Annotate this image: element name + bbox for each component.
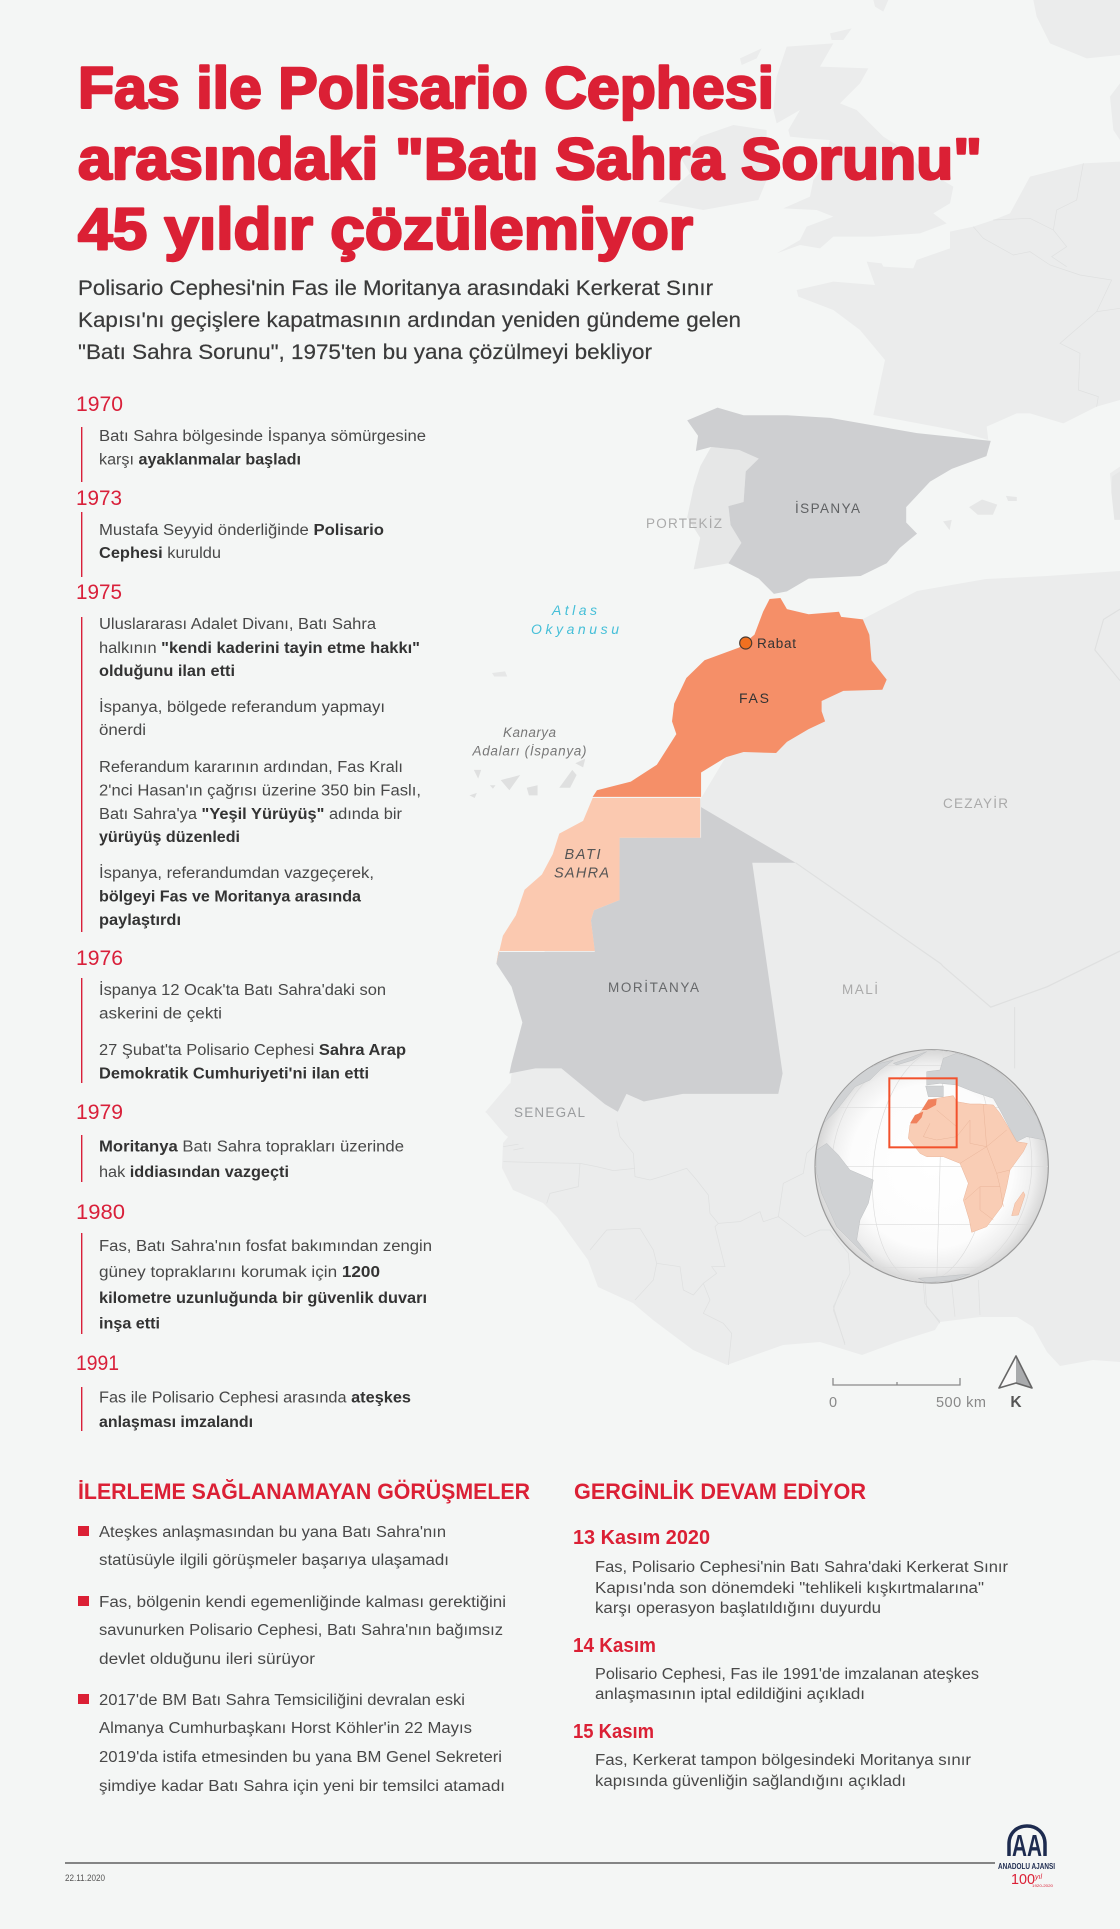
map label: Cezayir: CEZAYİR [943, 796, 1008, 811]
event: 14 Kasım: anlaşmasının iptal edildiğini açıkladı [595, 1686, 865, 1703]
timeline: 1975: 2'nci Hasan'ın çağrısı üzerine 350 bin Faslı, [99, 782, 421, 800]
event: 15 Kasım: kapısında güvenliğin sağlandığını açıkladı [595, 1773, 906, 1790]
bullet 3: 2017'de BM Batı Sahra Temsiciliğini devralan eski [99, 1692, 465, 1709]
title: 45 yıldır çözülemiyor [78, 197, 693, 262]
subtitle [78, 277, 741, 364]
timeline: 1975: yürüyüş düzenledi [99, 829, 240, 846]
timeline: 1975: olduğunu ilan etti [99, 663, 235, 680]
background map: Europe [658, 0, 1120, 500]
timeline: 1991: Fas ile Polisario Cephesi arasında ateşkes [99, 1390, 411, 1406]
timeline: 1975: 1975 [76, 580, 122, 604]
event: 15 Kasım: 15 Kasım [573, 1721, 654, 1743]
event: 13 Kasım 2020: 13 Kasım 2020 [573, 1527, 710, 1549]
timeline: 1973: Mustafa Seyyid önderliğinde Polisario [99, 522, 384, 539]
title [78, 56, 982, 262]
event: 15 Kasım: Fas, Kerkerat tampon bölgesindeki Moritanya sınır [595, 1752, 971, 1769]
logo: Anadolu Ajansı: 100 [1011, 1871, 1035, 1888]
timeline: 1975: İspanya, referandumdan vazgeçerek, [99, 864, 374, 882]
timeline: 1975: halkının "kendi kaderini tayin etme hakkı" [99, 640, 420, 657]
north arrow [999, 1356, 1032, 1411]
scale bar [829, 1378, 986, 1411]
bullet 2: devlet olduğunu ileri sürüyor [99, 1651, 315, 1668]
logo: Anadolu Ajansı: AA [1012, 1828, 1042, 1863]
map label: Atlas Okyanusu [531, 602, 619, 637]
map label: Portekiz: PORTEKİZ [646, 516, 722, 531]
timeline: 1979 [76, 1100, 404, 1182]
timeline: 1979: hak iddiasından vazgeçti [99, 1164, 289, 1181]
bullet 2 [78, 1594, 506, 1668]
timeline: 1975: Uluslararası Adalet Divanı, Batı Sahra [99, 616, 376, 633]
map: Algeria Mali border [796, 609, 1120, 1068]
logo: Anadolu Ajansı: 1920-2020 [1032, 1883, 1054, 1888]
timeline: 1970: Batı Sahra bölgesinde İspanya sömürgesine [99, 427, 426, 445]
heading: tension continues: GERGİNLİK DEVAM EDİYOR [574, 1479, 866, 1504]
globe: Africa [908, 1096, 1027, 1232]
bullet 1: statüsüyle ilgili görüşmeler başarıya ulaşamadı [99, 1552, 449, 1569]
logo: Anadolu Ajansı: yıl [1034, 1874, 1042, 1881]
timeline: 1991: 1991 [76, 1351, 119, 1375]
panel: tension continues [573, 1479, 1008, 1790]
globe: graticule [815, 1040, 1048, 1293]
background map: West Africa country borders [503, 1113, 940, 1365]
map label: Batı Sahra: BATI [564, 847, 600, 863]
map label: Batı Sahra: SAHRA [554, 866, 609, 882]
map label: Fas: FAS [739, 690, 769, 706]
timeline: 1975 [76, 580, 421, 932]
subtitle: Kapısı'nı geçişlere kapatmasının ardından yeniden gündeme gelen [78, 309, 741, 332]
map: Spain [687, 408, 991, 594]
bullet 2: savunurken Polisario Cephesi, Batı Sahra'nın bağımsız [99, 1622, 503, 1639]
map: Mauritania [496, 807, 796, 1112]
scale bar: 500 km [936, 1395, 986, 1411]
timeline: 1980: inşa etti [99, 1316, 160, 1332]
timeline: 1975: Referandum kararının ardından, Fas Kralı [99, 759, 403, 776]
timeline: 1976: İspanya 12 Ocak'ta Batı Sahra'daki son [99, 981, 386, 999]
event: 13 Kasım 2020: Fas, Polisario Cephesi'nin Batı Sahra'daki Kerkerat Sınır [595, 1559, 1008, 1576]
timeline: 1976: 1976 [76, 946, 123, 970]
locator globe [815, 1040, 1048, 1293]
map label: Mali: MALİ [842, 982, 878, 997]
event: 14 Kasım: 14 Kasım [573, 1635, 656, 1657]
bullet 2: Fas, bölgenin kendi egemenliğinde kalması gerektiğini [99, 1594, 506, 1611]
map label: Kanarya Adaları: Kanarya [503, 725, 556, 740]
footer rule [65, 1862, 995, 1864]
timeline: 1970: karşı ayaklanmalar başladı [99, 452, 301, 468]
timeline: 1976 [76, 946, 406, 1083]
map label: Senegal: SENEGAL [514, 1105, 585, 1120]
timeline: 1973 [76, 486, 384, 577]
event: 13 Kasım 2020 [573, 1527, 1008, 1617]
map: Senegal and neighbours [486, 1073, 618, 1150]
map label: Kanarya Adaları [472, 725, 586, 758]
background map: Africa land [485, 571, 1120, 1366]
timeline: 1976: askerini de çekti [99, 1006, 222, 1022]
timeline: 1980: güney topraklarını korumak için 1200 [99, 1264, 380, 1281]
timeline: 1970: 1970 [76, 392, 123, 416]
logo: Anadolu Ajansı: ANADOLU AJANSI [998, 1862, 1055, 1871]
map label: İspanya: İSPANYA [795, 501, 860, 516]
panel: stalled talks [78, 1479, 530, 1795]
timeline: 1979: Moritanya Batı Sahra toprakları üzerinde [99, 1138, 404, 1156]
subtitle: Polisario Cephesi'nin Fas ile Moritanya arasındaki Kerkerat Sınır [78, 277, 713, 300]
timeline: 1991: anlaşması imzalandı [99, 1414, 253, 1431]
event: 14 Kasım [573, 1635, 979, 1703]
timeline: 1991 [76, 1351, 411, 1431]
timeline: 1979: 1979 [76, 1100, 123, 1124]
timeline: 1976: Demokratik Cumhuriyeti'ni ilan etti [99, 1066, 369, 1082]
timeline: 1975: Batı Sahra'ya "Yeşil Yürüyüş" adında bir [99, 806, 402, 823]
map label: Batı Sahra [554, 847, 609, 882]
timeline: 1980: 1980 [76, 1200, 125, 1224]
bullet 1 [78, 1524, 449, 1569]
globe: grey continents [817, 1052, 1045, 1283]
map: Portugal [687, 447, 759, 569]
bullet 3: Almanya Cumhurbaşkanı Horst Köhler'in 22 Mayıs [99, 1720, 472, 1737]
footer date: 22.11.2020 [65, 1873, 105, 1884]
event: 13 Kasım 2020: karşı operasyon başlatıldığını duyurdu [595, 1600, 881, 1617]
timeline: 1975: bölgeyi Fas ve Moritanya arasında [99, 888, 361, 906]
title: Fas ile Polisario Cephesi [78, 56, 774, 121]
timeline: 1975: önerdi [99, 722, 146, 739]
map: Morocco [593, 598, 887, 797]
globe: locator rectangle [889, 1078, 957, 1147]
map marker: Rabat [740, 636, 796, 651]
bullet 3 [78, 1692, 505, 1795]
event: 15 Kasım [573, 1721, 971, 1790]
bullet 3: 2019'da istifa etmesinden bu yana BM Genel Sekreteri [99, 1749, 502, 1766]
map label: Atlas Okyanusu: Okyanusu [531, 621, 619, 637]
map label: Atlas Okyanusu: Atlas [551, 602, 597, 618]
timeline: 1980: Fas, Batı Sahra'nın fosfat bakımından zengin [99, 1238, 432, 1255]
timeline: 1973: 1973 [76, 486, 122, 510]
bullet 3: şimdiye kadar Batı Sahra için yeni bir temsilci atamadı [99, 1778, 505, 1795]
map: Western Sahara [496, 798, 700, 964]
bullet 1: Ateşkes anlaşmasından bu yana Batı Sahra'nın [99, 1524, 446, 1541]
scale bar: 0 [829, 1395, 837, 1411]
timeline: 1975: İspanya, bölgede referandum yapmayı [99, 698, 385, 716]
map marker: Rabat: Rabat [757, 636, 796, 651]
globe: Morocco and Western Sahara [910, 1099, 937, 1123]
background map: Guinea Gulf borders [833, 1280, 980, 1343]
timeline: 1970 [76, 392, 426, 482]
timeline: 1980: kilometre uzunluğunda bir güvenlik duvarı [99, 1290, 427, 1307]
logo: Anadolu Ajansı [998, 1826, 1055, 1888]
heading: stalled talks: İLERLEME SAĞLANAMAYAN GÖRÜŞMELER [78, 1479, 530, 1504]
title: arasındaki "Batı Sahra Sorunu" [78, 127, 982, 192]
map: highlighted countries [486, 408, 1120, 1150]
background map: islands [469, 471, 1120, 798]
timeline: 1976: 27 Şubat'ta Polisario Cephesi Sahra Arap [99, 1042, 406, 1059]
north arrow: K [1010, 1394, 1022, 1411]
event: 13 Kasım 2020: Kapısı'nda son dönemdeki "tehlikeli kışkırtmalarına" [595, 1580, 984, 1597]
timeline: 1973: Cephesi kuruldu [99, 545, 221, 562]
event: 14 Kasım: Polisario Cephesi, Fas ile 1991'de imzalanan ateşkes [595, 1666, 979, 1683]
map label: Moritanya: MORİTANYA [608, 980, 699, 995]
timeline: 1975: paylaştırdı [99, 912, 181, 929]
timeline: 1980 [76, 1200, 432, 1334]
subtitle: "Batı Sahra Sorunu", 1975'ten bu yana çözülmeyi bekliyor [78, 341, 652, 364]
map label: Kanarya Adaları: Adaları (İspanya) [472, 744, 586, 758]
